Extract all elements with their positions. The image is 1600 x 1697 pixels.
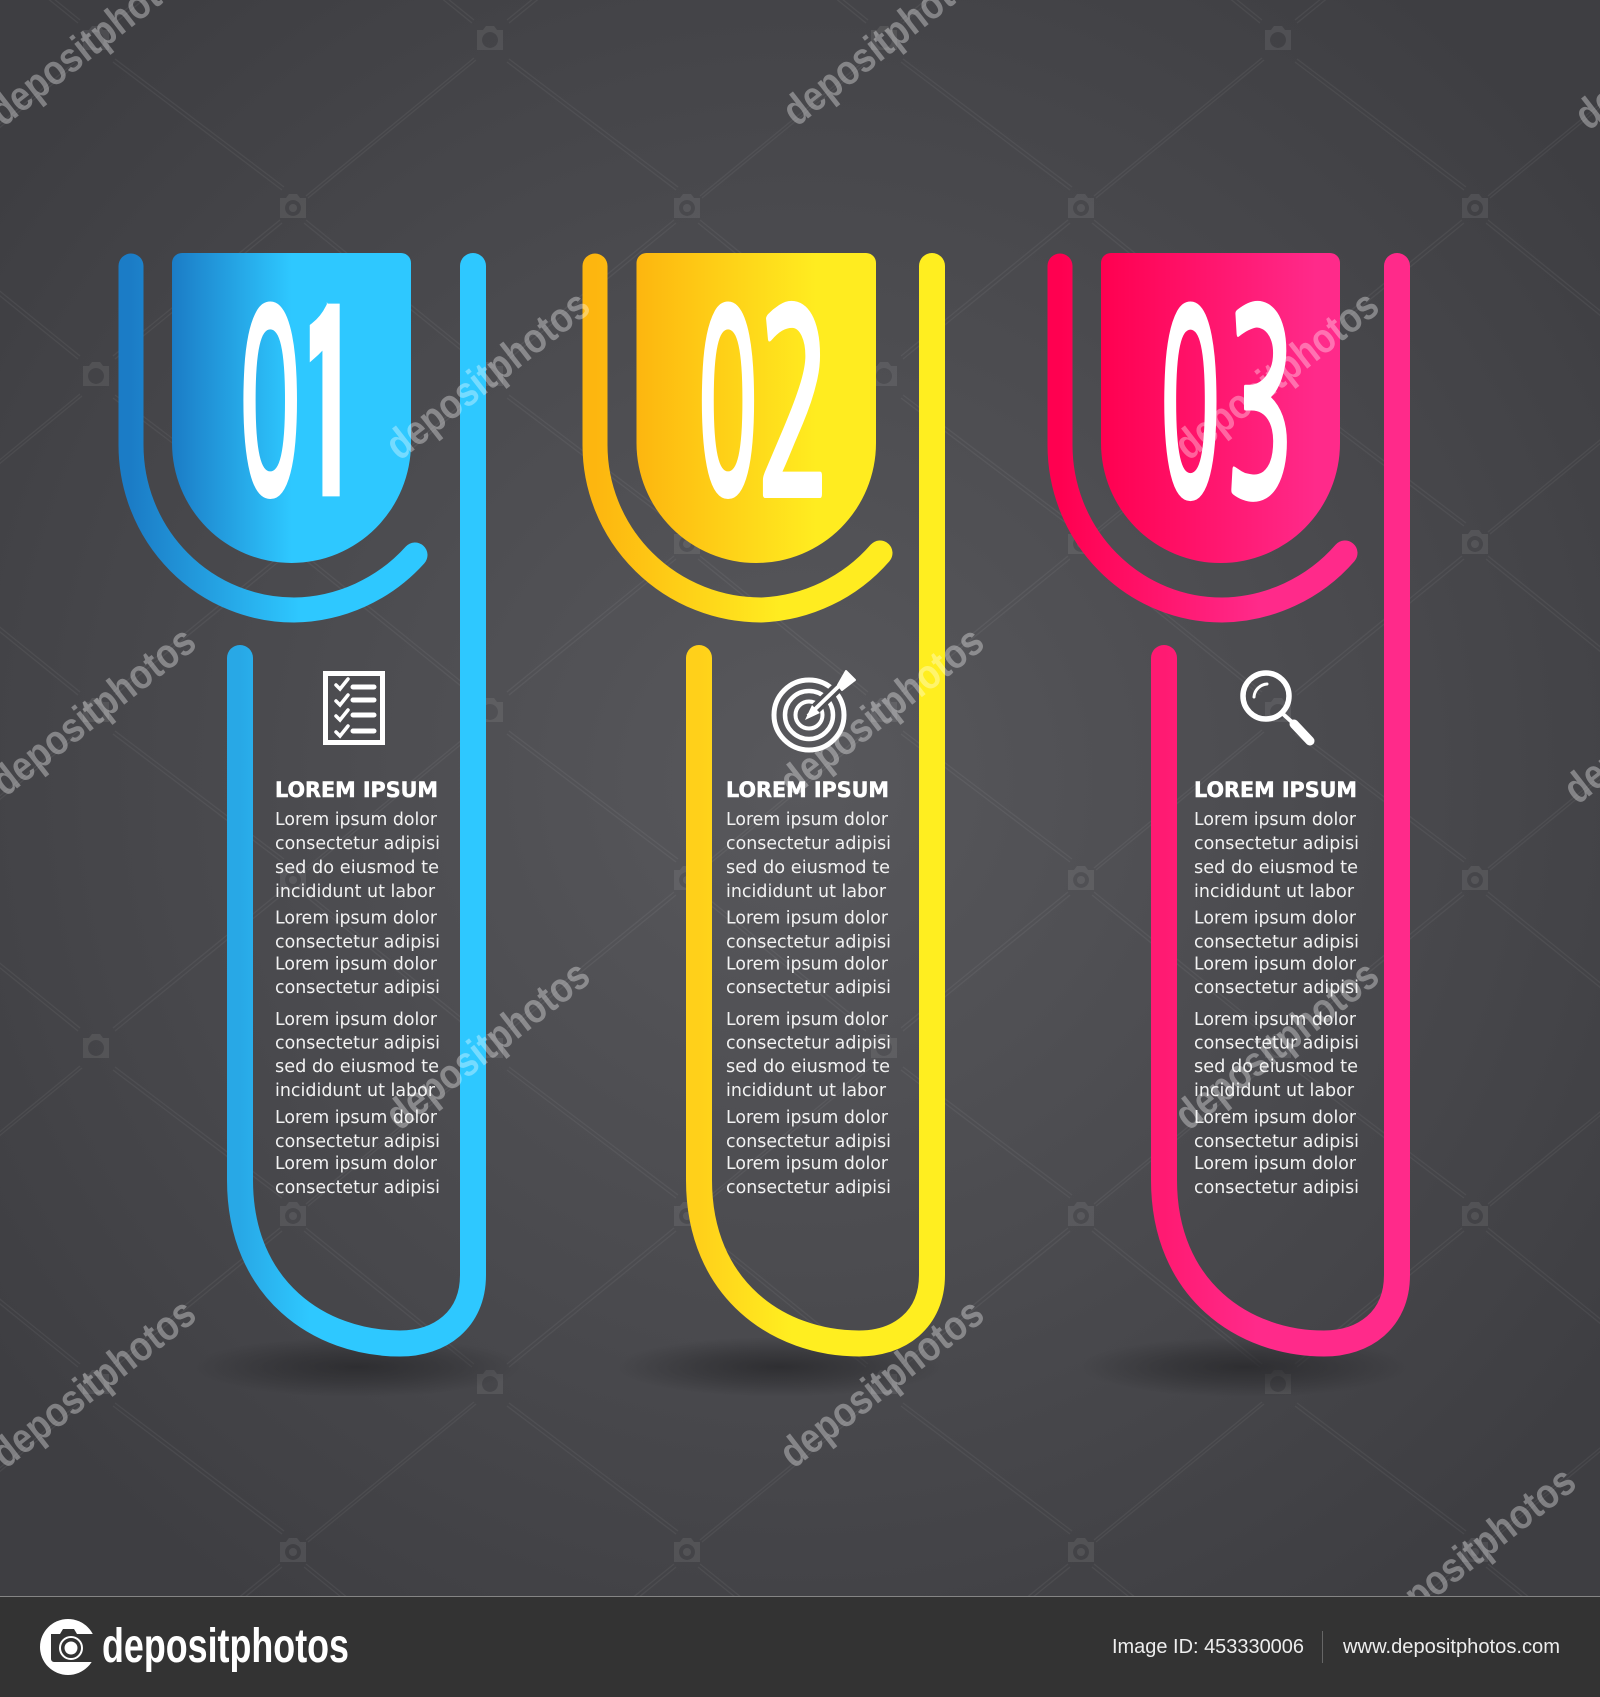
- body text: consectetur adipisi: [726, 1032, 891, 1054]
- footer logo: depositphotos: [102, 1620, 349, 1673]
- body text: Lorem ipsum dolor: [726, 954, 889, 974]
- body text: consectetur adipisi: [1194, 1032, 1359, 1054]
- body text: incididunt ut labor: [1194, 1080, 1355, 1101]
- pink long ribbon outline: [1164, 266, 1397, 1344]
- yellow outer U stroke: [595, 266, 880, 610]
- number 03: [1158, 283, 1297, 539]
- blue outer U stroke: [131, 266, 415, 610]
- number 02: [696, 283, 834, 536]
- body text: Lorem ipsum dolor: [275, 1009, 438, 1030]
- body text: consectetur adipisi: [1194, 977, 1359, 998]
- image id: Image ID: 453330006: [1112, 1636, 1304, 1658]
- body text: consectetur adipisi: [1194, 1177, 1359, 1198]
- body text: sed do eiusmod te: [726, 857, 890, 878]
- body text: consectetur adipisi: [726, 1177, 891, 1198]
- number 01: [237, 278, 359, 536]
- body text: Lorem ipsum dolor: [726, 1107, 889, 1128]
- body text: Lorem ipsum dolor: [1194, 1153, 1357, 1174]
- body text: consectetur adipisi: [726, 833, 891, 854]
- body text: [275, 809, 440, 1198]
- body text: Lorem ipsum dolor: [275, 1107, 438, 1128]
- body text: Lorem ipsum dolor: [726, 1009, 889, 1030]
- yellow shield badge: [636, 253, 876, 563]
- yellow long ribbon outline: [699, 266, 932, 1344]
- blue shield badge: [172, 253, 411, 563]
- number 01: 0: [237, 283, 302, 536]
- body text: incididunt ut labor: [726, 881, 887, 902]
- body text: consectetur adipisi: [275, 1131, 440, 1152]
- body text: consectetur adipisi: [275, 833, 440, 854]
- body text: consectetur adipisi: [275, 977, 440, 998]
- number 01: 1: [299, 278, 359, 532]
- body text: consectetur adipisi: [275, 1032, 440, 1054]
- website url: www.depositphotos.com: [1342, 1636, 1560, 1658]
- body text: Lorem ipsum dolor: [726, 809, 889, 830]
- body text: Lorem ipsum dolor: [1194, 809, 1357, 830]
- body text: consectetur adipisi: [1194, 1131, 1359, 1152]
- panel: step 02: [595, 253, 932, 1344]
- footer bar: [0, 1596, 1600, 1697]
- drop shadows under the three panels: [192, 1337, 1410, 1397]
- body text: consectetur adipisi: [726, 1131, 891, 1152]
- watermarks: depositphotos: [376, 281, 598, 469]
- body text: Lorem ipsum dolor: [1194, 1107, 1357, 1128]
- body text: Lorem ipsum dolor: [275, 908, 438, 928]
- body text: incididunt ut labor: [726, 1080, 887, 1101]
- body text: consectetur adipisi: [726, 977, 891, 998]
- watermarks: depositphotos: [1165, 951, 1387, 1139]
- body text: [1194, 809, 1359, 1198]
- watermarks: depositphotos: [1165, 281, 1387, 469]
- body text: Lorem ipsum dolor: [275, 809, 438, 830]
- body text: incididunt ut labor: [275, 881, 436, 902]
- watermarks: depositphotos: [376, 951, 598, 1139]
- body text: consectetur adipisi: [275, 1177, 440, 1198]
- heading: LOREM IPSUM: [1194, 778, 1357, 802]
- heading: LOREM IPSUM: [726, 778, 889, 802]
- number 02: 0: [696, 284, 759, 536]
- body text: consectetur adipisi: [1194, 833, 1359, 854]
- pink shield badge: [1101, 253, 1340, 563]
- icon: checklist: [326, 674, 382, 742]
- body text: sed do eiusmod te: [1194, 1056, 1358, 1077]
- footer logo: [40, 1619, 349, 1675]
- body text: Lorem ipsum dolor: [726, 908, 889, 928]
- body text: sed do eiusmod te: [275, 1056, 439, 1077]
- body text: incididunt ut labor: [275, 1080, 436, 1101]
- heading: LOREM IPSUM: [275, 778, 438, 802]
- blue long ribbon outline: [240, 266, 473, 1344]
- panel: step 01: [131, 253, 473, 1344]
- body text: Lorem ipsum dolor: [275, 954, 438, 974]
- body text: Lorem ipsum dolor: [1194, 1009, 1357, 1030]
- icon: target with dart: [774, 671, 855, 750]
- number 03: 0: [1158, 283, 1222, 538]
- body text: consectetur adipisi: [1194, 932, 1359, 952]
- body text: incididunt ut labor: [1194, 881, 1355, 902]
- body text: Lorem ipsum dolor: [1194, 908, 1357, 928]
- body text: Lorem ipsum dolor: [275, 1153, 438, 1174]
- number 02: 2: [756, 283, 834, 536]
- body text: sed do eiusmod te: [275, 857, 439, 878]
- body text: [726, 809, 891, 1198]
- pink outer U stroke: [1060, 266, 1345, 610]
- watermarks: depositphotos: [770, 617, 992, 805]
- body text: sed do eiusmod te: [1194, 857, 1358, 878]
- watermarks: depositphotos: [770, 1289, 992, 1477]
- number 03: 3: [1224, 283, 1297, 539]
- body text: sed do eiusmod te: [726, 1056, 890, 1077]
- body text: Lorem ipsum dolor: [1194, 954, 1357, 974]
- body text: consectetur adipisi: [275, 932, 440, 952]
- body text: consectetur adipisi: [726, 932, 891, 952]
- icon: magnifying glass: [1243, 673, 1310, 741]
- panel: step 03: [1060, 253, 1397, 1344]
- body text: Lorem ipsum dolor: [726, 1153, 889, 1174]
